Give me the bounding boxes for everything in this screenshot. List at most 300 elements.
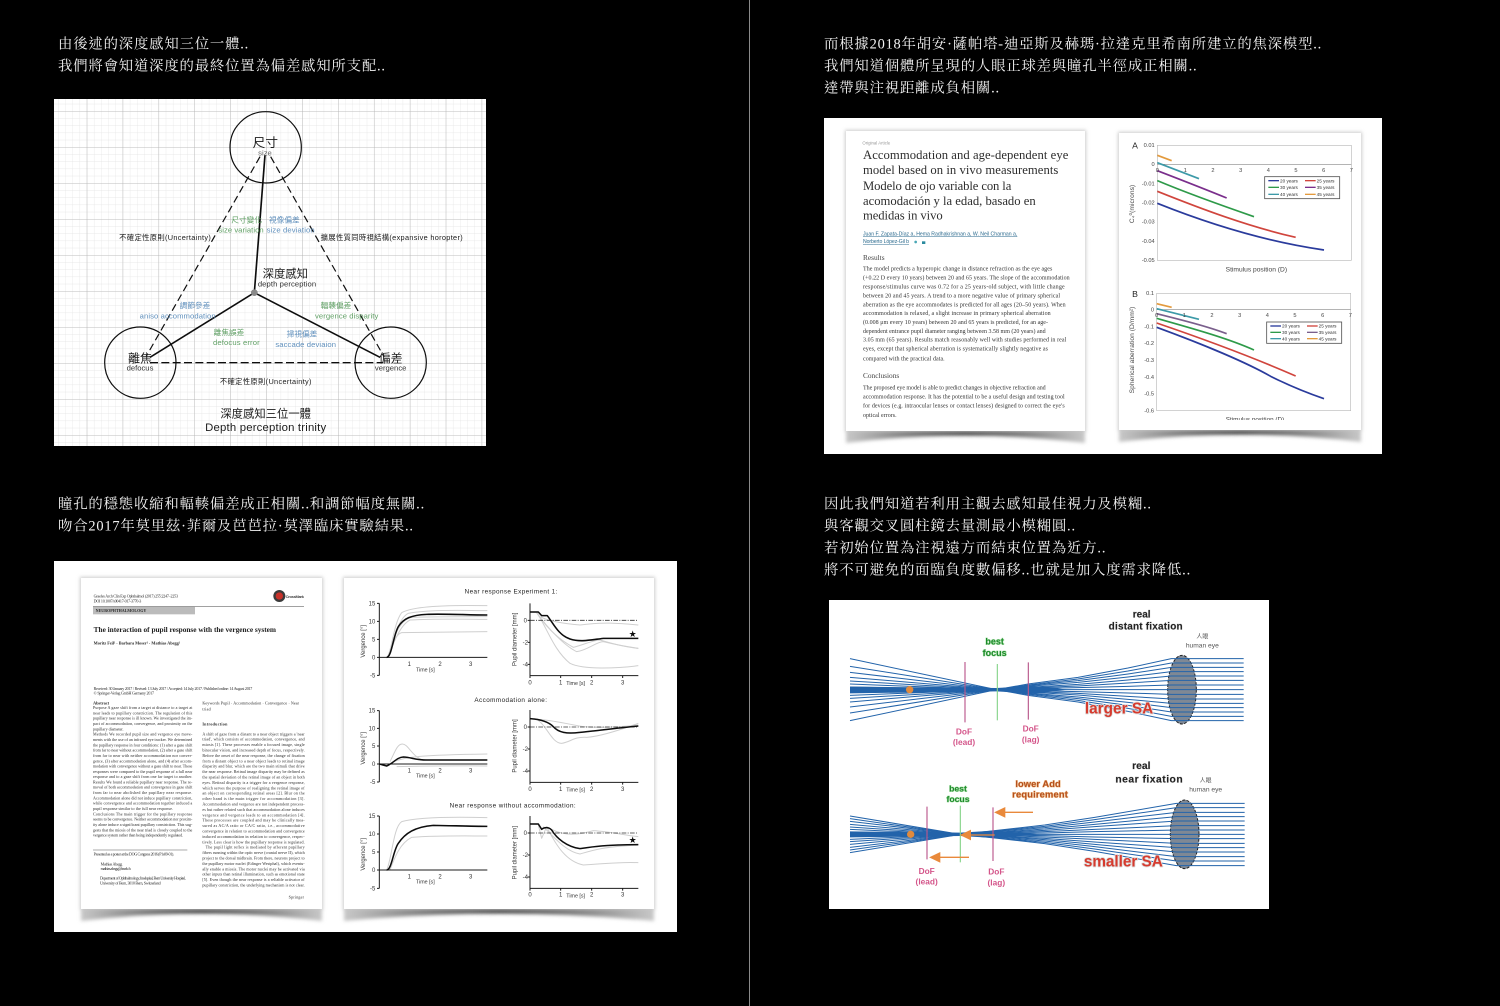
panel: eye model paper and charts	[54, 118, 1382, 932]
article: pupil response paper: DOI 10.1007/s00417-017-3770-3	[94, 598, 141, 603]
article: pupil response paper	[93, 590, 305, 899]
arrows: lower add requirement shift	[931, 808, 1033, 862]
chart A: C₄⁰(microns)	[1128, 185, 1136, 223]
legend B	[1267, 322, 1342, 343]
chart: no accommodation vergence: 1	[408, 874, 412, 880]
article: pupil response paper: triad	[202, 706, 211, 711]
article: pupil response paper: disparity and blur, which are the two main stimuli that drive	[202, 764, 305, 770]
labels: DoF	[919, 866, 935, 876]
crossmark logo	[273, 590, 305, 602]
legend B: 25 years	[1319, 324, 1337, 329]
chart: accommodation vergence: 10	[369, 726, 376, 732]
chart: no accommodation vergence: 3	[469, 874, 473, 880]
chart: no accommodation pupil: Pupil diameter [mm]	[513, 826, 519, 879]
labels: best	[985, 637, 1004, 647]
caption: bottom right: 與客觀交叉圓柱鏡去量測最小模糊圓..	[824, 516, 1076, 534]
chart: accommodation vergence: 0	[372, 762, 376, 768]
diagram labels: vergence	[375, 364, 406, 373]
chart: near response pupil: 0	[528, 681, 532, 687]
article: pupil response paper: which serves the purpose of realigning the retinal image of	[202, 785, 305, 790]
article: pupil response paper: Accommodation and vergence are not independent process-	[202, 801, 305, 806]
article: pupil response paper: The interaction of pupil response with the vergence system	[94, 625, 276, 634]
chart: no accommodation pupil: 0	[528, 893, 532, 899]
article: pupil response paper: while convergence and accommodation together induced a	[93, 801, 193, 806]
article: pupil response paper: University of Bern, 3010 Bern, Switzerland	[100, 880, 161, 886]
chart B: 1	[1183, 313, 1186, 319]
chart: near response pupil: -4	[523, 662, 529, 668]
chart: near response pupil: 2	[590, 681, 594, 687]
diagram labels: defocus error	[213, 338, 260, 347]
chart: no accommodation pupil: 3	[621, 893, 625, 899]
caption: bottom left: 瞳孔的穩態收縮和輻輳偏差成正相關..和調節幅度無關..	[58, 494, 425, 512]
chart A: 0.01	[1144, 143, 1155, 149]
diagram: near fixation smaller SA	[850, 761, 1245, 887]
chart B: 0	[1151, 307, 1154, 313]
chart: near response pupil: 0	[524, 618, 528, 624]
chart: near response vergence: 10	[369, 619, 376, 625]
chart: no accommodation pupil: -2	[523, 853, 529, 859]
chart: no accommodation pupil: -4	[523, 875, 529, 881]
article: pupil response paper: pupil response similar to the full near response.	[93, 806, 173, 811]
labels: (lag)	[988, 877, 1005, 887]
diagram labels: 視像偏差	[269, 214, 300, 224]
article: eye model abstract: accommodation response. It has the potential to be a useful design and testing tool	[863, 393, 1065, 400]
legend B: 35 years	[1319, 330, 1337, 335]
chart: accommodation pupil: 0	[524, 725, 528, 731]
chart: near response vergence: 0	[372, 655, 376, 661]
article: eye model abstract: (+0.22 D every 10 years) between 20 and 65 years. The slope of the accommodation	[863, 275, 1070, 282]
article: pupil response paper: Graefes Arch Clin Exp Ophthalmol (2017) 255:2247–2253	[94, 594, 178, 599]
legend B: 45 years	[1319, 336, 1337, 341]
chart A: -0.05	[1142, 258, 1155, 264]
markers	[965, 662, 1028, 722]
chart: accommodation pupil: 1	[559, 787, 563, 793]
chart A: -0.02	[1142, 201, 1155, 207]
chart: no accommodation vergence: 10	[369, 832, 376, 838]
diagram labels: 掃視偏差	[287, 329, 318, 339]
labels: lower Add	[1015, 779, 1061, 789]
diagram labels: saccade deviaion	[275, 340, 336, 349]
rays	[850, 803, 1245, 866]
chart: near response vergence: 15	[369, 601, 376, 607]
chart: accommodation vergence: 1	[408, 769, 412, 775]
article: pupil response paper: the pupillary response in four conditions: (1) after a gaze shift	[93, 742, 193, 747]
chart A	[1128, 140, 1353, 274]
chart A: 2	[1211, 168, 1215, 174]
article: eye model abstract: Conclusions	[863, 371, 899, 380]
article: pupil response paper: binocular vision, and increased depth of focus, respectively.	[202, 747, 305, 753]
caption: top right: 達帶與注視距離成負相關..	[824, 78, 1000, 96]
legend B: 20 years	[1282, 324, 1301, 329]
chart: accommodation pupil: -4	[523, 769, 529, 775]
article: pupil response paper: Presented as a poster at the DOG Congress 2016 (P1s09-01).	[94, 851, 174, 856]
article: pupil response paper: tively. Less clear is how the pupillary response is regulated.	[202, 839, 305, 844]
diagram labels: 調節參差	[180, 300, 211, 310]
paper shadow	[80, 577, 655, 921]
chart: accommodation vergence: Time [s]	[416, 773, 435, 779]
article: pupil response paper: ally enable a miosis. The motor nuclei may be activated via	[202, 866, 305, 871]
article: eye model abstract: acomodación y la edad, basado en	[863, 194, 1036, 208]
rays	[850, 659, 1244, 721]
chart: no accommodation vergence: 5	[372, 850, 376, 856]
labels	[953, 609, 1183, 747]
article: eye model abstract: Juan F. Zapata-Díaz a, Hema Radhakrishnan a, W. Neil Charman a,	[863, 231, 1017, 237]
diagram: distant fixation larger SA: 人眼	[1196, 634, 1208, 641]
labels: distant fixation	[1109, 622, 1183, 633]
article: eye model abstract: The model predicts a hyperopic change in distance refraction as the eye ages	[863, 266, 1053, 273]
charts: vergence and pupil diameter: Near response without accommodation:	[450, 803, 576, 810]
chart: accommodation pupil: Pupil diameter [mm]	[513, 719, 519, 773]
diagram labels: 尺寸變化	[231, 214, 262, 224]
article: eye model abstract: Results	[863, 253, 885, 262]
chart: near response vergence: 2	[438, 662, 442, 668]
chart: no accommodation pupil: ★	[629, 836, 637, 845]
article: eye model abstract: Accommodation and age-dependent eye	[863, 148, 1069, 162]
chart: accommodation pupil	[513, 710, 638, 793]
chart: no accommodation vergence: 15	[369, 814, 376, 820]
article: pupil response paper: from far to near with neither accommodation nor conver-	[93, 753, 193, 758]
article: pupil response paper: Accommodation alone did not induce pupillary constriction,	[93, 795, 192, 801]
article: pupil response paper: ments with the use of an infrared eye tracker. We determined	[93, 737, 192, 742]
caption: top right: 我們知道個體所呈現的人眼正球差與瞳孔半徑成正相關..	[824, 56, 1197, 74]
diagram labels: 深度感知	[263, 266, 308, 280]
chart B: 6	[1321, 313, 1324, 319]
legend A: 45 years	[1317, 192, 1335, 197]
chart: no accommodation vergence	[361, 814, 487, 892]
labels: DoF	[1023, 724, 1039, 734]
diagram: near fixation smaller SA: human eye	[1189, 787, 1222, 794]
chart B: -0.2	[1144, 341, 1154, 347]
chart A: -0.03	[1142, 220, 1155, 226]
article: pupil response paper: near leads to pupillary constriction. The regulation of this	[93, 710, 193, 715]
article: pupil response paper: the near response. Retinal image disparity may be defined as	[202, 769, 305, 774]
article: eye model abstract: between 20 and 45 years. A trend to a more negative value of primary spherical	[863, 292, 1060, 299]
chart A: 6	[1322, 168, 1325, 174]
diagram labels: 深度感知三位一體	[220, 406, 311, 420]
article: eye model abstract: (0.008 μm every 10 years) between 20 and 65 years is predicted, for an age-	[863, 319, 1048, 326]
panel: spherical aberration ray diagrams	[829, 600, 1269, 909]
panel: depth perception trinity diagram	[54, 99, 486, 446]
article: pupil response paper: sured as AC/A ratio or CA/C ratio, i.e., accommodative	[202, 823, 305, 829]
chart: accommodation vergence: 2	[438, 769, 442, 775]
labels: real	[1132, 761, 1151, 772]
chart: no accommodation vergence: 2	[438, 874, 442, 880]
legend A: 20 years	[1280, 178, 1299, 183]
article: pupil response paper: an object on corresponding retinal areas [2]. Blur on the	[202, 791, 305, 796]
labels: best	[949, 783, 967, 793]
legend B: 40 years	[1282, 336, 1301, 341]
chart A: Stimulus position (D)	[1226, 267, 1287, 274]
chart B: B	[1132, 289, 1138, 299]
chart: no accommodation vergence: 0	[372, 868, 376, 874]
article: pupil response paper: Department of Ophthalmology, Inselspital, Bern University Hospital,	[100, 876, 186, 882]
caption: bottom right: 將不可避免的面臨負度數偏移..也就是加入度需求降低..	[824, 560, 1191, 578]
chart A: 3	[1239, 168, 1242, 174]
chart: near response pupil: Pupil diameter [mm]	[513, 612, 519, 666]
labels: smaller SA	[1084, 853, 1163, 870]
legend B: 30 years	[1282, 330, 1301, 335]
chart: no accommodation vergence: Vergence [°]	[361, 838, 367, 871]
diagram labels: 離焦	[128, 351, 152, 365]
chart: near response vergence	[361, 601, 487, 679]
charts: vergence and pupil diameter	[361, 589, 638, 899]
chart B: 4	[1266, 313, 1269, 319]
caption: bottom right: 若初始位置為注視遠方而結束位置為近方..	[824, 538, 1106, 556]
diagram: near fixation smaller SA: 人眼	[1200, 778, 1212, 785]
article: pupil response paper: other inputs than retinal illumination, such as emotional state	[202, 872, 305, 878]
chart B: 0.1	[1146, 291, 1154, 297]
caption: bottom left	[58, 494, 425, 534]
diagram labels: size	[258, 148, 272, 157]
article: pupil response paper: NEUROPHTHALMOLOGY	[96, 608, 146, 613]
charts: vergence and pupil diameter: Accommodation alone:	[474, 697, 547, 704]
diagram labels: aniso accommodation	[140, 311, 216, 320]
chart B: Stimulus position (D)	[1226, 417, 1284, 424]
chart A: 0	[1156, 168, 1159, 174]
chart: no accommodation vergence: -5	[370, 886, 376, 892]
article: pupil response paper: Introduction	[202, 722, 228, 727]
chart: near response vergence: 5	[372, 637, 376, 643]
chart B: -0.4	[1144, 375, 1154, 381]
article: pupil response paper: These processes are coupled and may be clinically mea-	[202, 818, 305, 823]
labels: near fixation	[1115, 774, 1183, 785]
chart A: 0	[1152, 162, 1155, 168]
caption: top left: 由後述的深度感知三位一體..	[58, 34, 249, 52]
article: pupil response paper: [5]. Even though the near response is a reliable activator of	[202, 877, 305, 882]
labels: (lead)	[953, 737, 975, 747]
labels: DoF	[956, 726, 972, 736]
labels: requirement	[1012, 790, 1068, 800]
article: eye model abstract: medidas in vivo	[863, 209, 943, 223]
article: pupil response paper: from far to near without accommodation, (2) after a gaze shift	[93, 748, 193, 754]
caption: top left: 我們將會知道深度的最終位置為偏差感知所支配..	[58, 56, 386, 74]
article: pupil response paper: fibers running within the optic nerve (cranial nerve II), which	[202, 850, 305, 856]
chart B: -0.6	[1144, 408, 1154, 414]
chart: near response pupil: 3	[621, 681, 625, 687]
charts: spherical aberration vs stimulus position	[1128, 140, 1353, 424]
article: pupil response paper: Before the onset of the near response, the change of fixation	[202, 753, 305, 759]
diagram: distant fixation larger SA	[850, 609, 1244, 747]
chart A: 4	[1267, 168, 1270, 174]
chart: near response pupil	[513, 603, 638, 687]
article: eye model abstract: accommodation is relaxed, a slight increase in primary spherical aberration	[863, 311, 1051, 317]
caption: top right: 而根據2018年胡安·薩帕塔-迪亞斯及赫瑪·拉達克里希南所建立的焦深模型..	[824, 34, 1322, 52]
article: pupil response paper: Methods We recorded pupil size and vergence eye move-	[93, 732, 193, 737]
chart: accommodation vergence: 3	[469, 769, 473, 775]
chart: accommodation pupil: -2	[523, 747, 529, 753]
diagram labels: 偏差	[379, 351, 403, 365]
chart: accommodation vergence: Vergence [°]	[361, 732, 367, 765]
chart B: 5	[1293, 313, 1297, 319]
chart: accommodation pupil: 3	[621, 787, 625, 793]
panel: pupil response paper and charts	[54, 561, 677, 932]
article: pupil response paper: vergence and vergence leads to an accommodation [4].	[202, 812, 305, 817]
article: pupil response paper: es but rather related such that accommodation alone induces	[202, 807, 305, 812]
article: pupil response paper: triad', which consists of accommodation, convergence, and	[202, 737, 305, 743]
article: pupil response paper: Springer	[289, 894, 305, 899]
article: pupil response paper: from far to near abolished the pupillary near response.	[93, 790, 192, 795]
article: pupil response paper: Conclusions The main trigger for the pupillary response	[93, 811, 193, 816]
diagram labels: 不確定性原則(Uncertainty)	[119, 233, 211, 242]
crossmark logo: CrossMark	[286, 594, 305, 599]
legend A: 25 years	[1317, 178, 1335, 183]
chart: near response pupil: 1	[559, 681, 563, 687]
chart: accommodation pupil: Time [s]	[566, 787, 586, 793]
chart: near response vergence: Vergence [°]	[361, 625, 367, 658]
chart A: 5	[1294, 168, 1298, 174]
labels: DoF	[988, 867, 1004, 877]
diagram labels: 輻輳偏差	[321, 300, 352, 310]
chart B: -0.1	[1144, 324, 1154, 330]
chart B: -0.3	[1144, 358, 1154, 364]
article: pupil response paper: modation with convergence without a gaze shift to near. These	[93, 764, 193, 769]
diagram labels: 尺寸	[253, 136, 278, 150]
diagram labels: defocus	[127, 364, 154, 373]
chart B: -0.5	[1144, 392, 1154, 398]
diagram labels: 不確定性原則(Uncertainty)	[220, 377, 311, 386]
chart: near response vergence: 3	[469, 662, 473, 668]
article: eye model abstract	[862, 141, 1070, 419]
chart A: -0.04	[1142, 239, 1155, 245]
article: pupil response paper: The pupil light reflex is mediated by afferent pupillary	[206, 845, 305, 850]
article: pupil response paper: vergence system rather than being independently regulated.	[93, 832, 183, 837]
article: eye model abstract: response/stimulus curve was 0.72 for a 25 years-old subject, with little change	[863, 283, 1065, 290]
diagram labels: 離焦誤差	[214, 327, 245, 337]
caption: top right	[824, 34, 1322, 96]
caption: top left	[58, 34, 386, 74]
chart A: 7	[1350, 168, 1353, 174]
diagram labels: vergence disparity	[315, 311, 379, 320]
article: eye model abstract: for devices (e.g. intraocular lenses or contact lenses) designed to correct the eye's	[863, 403, 1065, 410]
article: pupil response paper: other hand is the main trigger for accommodation [3].	[202, 796, 305, 801]
article: pupil response paper: response and to a gaze shift from one far target to another.	[93, 774, 192, 779]
chart B: 0	[1155, 313, 1158, 319]
legend A: 40 years	[1280, 192, 1299, 197]
markers	[927, 806, 993, 862]
chart B	[1129, 289, 1352, 424]
article: pupil response paper: the pupillary motor nuclei (Edinger Westphal), which eventu-	[202, 861, 305, 867]
chart B: 7	[1349, 313, 1352, 319]
legend A	[1265, 177, 1340, 199]
chart: no accommodation pupil	[513, 816, 638, 899]
article: pupil response paper: moval of both accommodation and convergence in gaze shift	[93, 785, 193, 790]
chart: accommodation vergence: -5	[370, 780, 376, 786]
article: pupil response paper: ity alone induce a significant pupillary constriction. This sug-	[93, 822, 193, 827]
chart B: 3	[1238, 313, 1241, 319]
labels: larger SA	[1085, 701, 1153, 718]
diagram labels	[119, 136, 463, 434]
chart: no accommodation pupil: 1	[559, 893, 563, 899]
chart: accommodation vergence	[361, 709, 487, 786]
article: eye model abstract: optical errors.	[863, 413, 897, 419]
caption: bottom right	[824, 494, 1191, 578]
article: pupil response paper: project to the dorsal midbrain. From there, neurons project to	[202, 855, 305, 861]
article: eye model abstract: Norberto López-Gil b	[863, 239, 909, 245]
article: eye model abstract: 3.05 mm (65 years). Results match reasonably well with studies performed in real	[863, 337, 1067, 344]
chart: no accommodation pupil: Time [s]	[566, 893, 586, 899]
diagram labels: 擴展性質同時視結構(expansive horopter)	[321, 233, 463, 242]
article: pupil response paper: miosis [1]. These processes enable a focused image, single	[202, 742, 305, 748]
article: pupil response paper: responses were compared to the pupil response of a full near	[93, 769, 193, 774]
labels: (lead)	[916, 877, 938, 887]
article: eye model abstract: compared with the practical data.	[863, 356, 945, 362]
article: pupil response paper: pupillary constriction, the underlying mechanism is not clear.	[202, 882, 305, 888]
diagram labels: size variation	[218, 226, 264, 235]
labels: focus	[983, 648, 1007, 658]
charts: vergence and pupil diameter: Near response Experiment 1:	[465, 589, 558, 596]
chart: accommodation vergence: 5	[372, 744, 376, 750]
article: pupil response paper: Results We found a reliable pupillary near response. The re-	[93, 779, 193, 784]
chart: no accommodation vergence: Time [s]	[416, 879, 435, 885]
legend A: 35 years	[1317, 185, 1335, 190]
labels: (lag)	[1022, 734, 1040, 744]
article: pupil response paper: seems to be convergence. Neither accommodation nor proxim-	[93, 817, 193, 822]
article: eye model abstract: model based on in vivo measurements	[863, 163, 1058, 177]
chart A: A	[1132, 140, 1138, 150]
article: pupil response paper: eyes. Retinal disparity is a trigger for a vergence response,	[202, 780, 305, 786]
diagram labels: Depth perception trinity	[205, 422, 326, 434]
labels: focus	[946, 794, 970, 804]
chart: near response vergence: Time [s]	[416, 668, 435, 674]
chart: near response pupil: -2	[523, 640, 529, 646]
article: pupil response paper: A shift of gaze from a distant to a near object triggers a 'near	[202, 731, 305, 736]
eye lens	[1168, 655, 1196, 724]
chart: no accommodation pupil: 2	[590, 893, 594, 899]
article: eye model abstract: Modelo de ojo variable con la	[863, 179, 1012, 193]
article: eye model abstract: aberration as the eye accommodates is predicted for all ages (20–50 years). When	[863, 301, 1066, 308]
labels: real	[1133, 609, 1151, 620]
article: pupil response paper: Purpose A gaze shift from a target at distance to a target at	[93, 705, 193, 710]
chart: accommodation vergence: 15	[369, 709, 376, 715]
diagram: distant fixation larger SA: human eye	[1186, 642, 1219, 649]
article: pupil response paper: convergence in relation to accommodation and convergence	[202, 828, 305, 833]
chart B: Spherical aberration (D/mm²)	[1129, 307, 1136, 393]
chart: accommodation pupil: 2	[590, 787, 594, 793]
article: pupil response paper: gests that the miosis of the near triad is closely coupled to the	[93, 827, 193, 832]
article: eye model abstract: dependent entrance pupil diameter ranging between 3.58 mm (20 years) and	[863, 328, 1046, 335]
diagram lines	[105, 112, 426, 398]
chart: near response vergence: 1	[408, 662, 412, 668]
eye lens	[1170, 800, 1199, 869]
article: pupil response paper: pact of accommodation, convergence, and proximity on the	[93, 721, 193, 727]
chart: near response pupil: Time [s]	[566, 681, 586, 687]
caption: bottom left: 吻合2017年莫里茲·菲爾及芭芭拉·莫澤臨床實驗結果..	[58, 516, 414, 534]
article: pupil response paper: from a distant object to a near object leads to retinal image	[202, 758, 305, 763]
caption: bottom right: 因此我們知道若利用主觀去感知最佳視力及模糊..	[824, 494, 1152, 512]
diagram labels: depth perception	[258, 280, 316, 289]
chart: no accommodation pupil: 0	[524, 831, 528, 837]
article: eye model abstract: The proposed eye model is able to predict changes in objective refraction and	[863, 385, 1046, 392]
article: pupil response paper: Received: 30 January 2017 / Revised: 13 July 2017 / Accepted: 14 July 2017 / Published online: 14 August 2017	[94, 686, 252, 691]
article: pupil response paper: Abstract	[93, 700, 110, 705]
legend A: 30 years	[1280, 185, 1299, 190]
article: pupil response paper: pupillary diameter.	[93, 726, 124, 731]
chart: near response pupil: ★	[629, 630, 637, 639]
article: pupil response paper: Moritz Feil¹ · Barbara Moser¹ · Mathias Abegg¹	[94, 641, 181, 646]
article: pupil response paper: Mathias Abegg	[101, 861, 122, 866]
chart: near response vergence: -5	[370, 673, 376, 679]
diagram labels: size deviation	[267, 226, 315, 235]
article: eye model abstract: Original Article	[862, 141, 891, 146]
chart B: 2	[1210, 313, 1214, 319]
article: pupil response paper: © Springer-Verlag GmbH Germany 2017	[94, 690, 154, 695]
chart A: -0.01	[1142, 181, 1155, 187]
chart A: 1	[1184, 168, 1187, 174]
article: pupil response paper: mathias.abegg@insel.ch	[101, 866, 131, 871]
article: pupil response paper: pupillary near response is ill known. We investigated the im-	[93, 716, 193, 721]
chart: accommodation pupil: 0	[528, 787, 532, 793]
article: pupil response paper: the spatial deviation of the retinal image of an object in both	[202, 774, 305, 779]
